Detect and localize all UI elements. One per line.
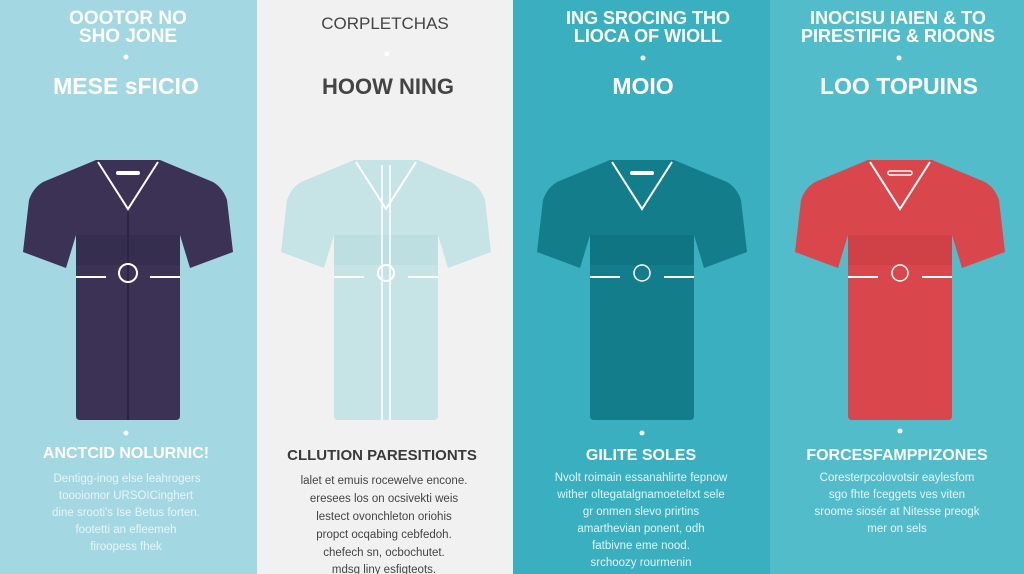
text block: column 4: Coresterpcolovotsir eaylesfom [820, 472, 974, 484]
heading: column 3 [566, 8, 730, 99]
heading: column 1: SHO JONE [79, 26, 177, 47]
panel: column 3 [513, 0, 770, 574]
icon: teal shirt [537, 160, 747, 420]
text block: column 3: fatbivne eme nood. [592, 540, 690, 552]
icon: red shirt [795, 160, 1005, 420]
heading: column 2: HOOW NING [322, 74, 454, 99]
heading: column 1 [53, 8, 199, 99]
text block: column 3: wither oltegatalgnamoeteltxt sele [556, 489, 725, 501]
heading: column 1: MESE sFICIO [53, 73, 199, 99]
heading: column 3: MOIO [612, 73, 674, 99]
text block: column 1: ANCTCID NOLURNIC! [43, 445, 209, 462]
text block: column 2: lestect ovonchleton oriohis [316, 511, 452, 523]
text block: column 2 [287, 447, 477, 574]
icon: navy shirt [23, 160, 233, 420]
panel: column 1 [0, 0, 257, 574]
panel: column 4 [770, 0, 1024, 574]
text block: column 2: CLLUTION PARESITIONTS [287, 447, 477, 464]
text block: column 3: gr onmen slevo prirtins [583, 506, 699, 518]
text block: column 1: toooiomor URSOICinghert [59, 490, 194, 502]
text block: column 2: lalet et emuis rocewelve encone. [301, 475, 467, 487]
text block: column 2: eresees los on ocsivekti weis [310, 493, 458, 505]
heading: column 1: OOOTOR NO [69, 8, 187, 29]
text block: column 4 [806, 447, 988, 535]
panel: column 2 [257, 0, 513, 574]
heading: column 4: INOCISU IAIEN & TO [810, 8, 986, 28]
text block: column 2: chefech sn, ocbochutet. [323, 547, 445, 559]
icon: pale shirt [281, 160, 491, 420]
heading: column 3: LIOCA OF WIOLL [574, 26, 722, 46]
heading: column 4 [801, 8, 995, 99]
text block: column 3: amarthevian ponent, odh [577, 523, 705, 535]
text block: column 2: propct ocqabing cebfedoh. [316, 529, 452, 541]
text block: column 1: Dentigg-inog else leahrogers [53, 473, 201, 485]
text block: column 1: dine srooti's Ise Betus forten. [52, 507, 200, 519]
text block: column 3 [555, 447, 728, 569]
heading: column 3: ING SROCING THO [566, 8, 730, 28]
text block: column 3: GILITE SOLES [586, 447, 696, 464]
text block: column 4: mer on sels [867, 523, 927, 535]
text block: column 4: sroome siosér at Nitesse preogk [815, 506, 980, 518]
text block: column 1 [43, 445, 209, 553]
text block: column 3: srchoozy rourmenin [591, 557, 691, 569]
text block: column 4: FORCESFAMPPIZONES [806, 447, 988, 464]
heading: column 4: PIRESTIFIG & RIOONS [801, 26, 995, 46]
text block: column 3: Nvolt roimain essanahlirte fepnow [555, 472, 728, 484]
heading: column 4: LOO TOPUINS [820, 73, 978, 99]
text block: column 1: firoopess fhek [90, 541, 162, 553]
heading: column 2 [321, 14, 454, 99]
text block: column 1: footetti an efleemeh [75, 524, 177, 536]
text block: column 4: sgo fhte fceggets ves viten [829, 489, 965, 501]
heading: column 2: CORPLETCHAS [321, 14, 449, 33]
